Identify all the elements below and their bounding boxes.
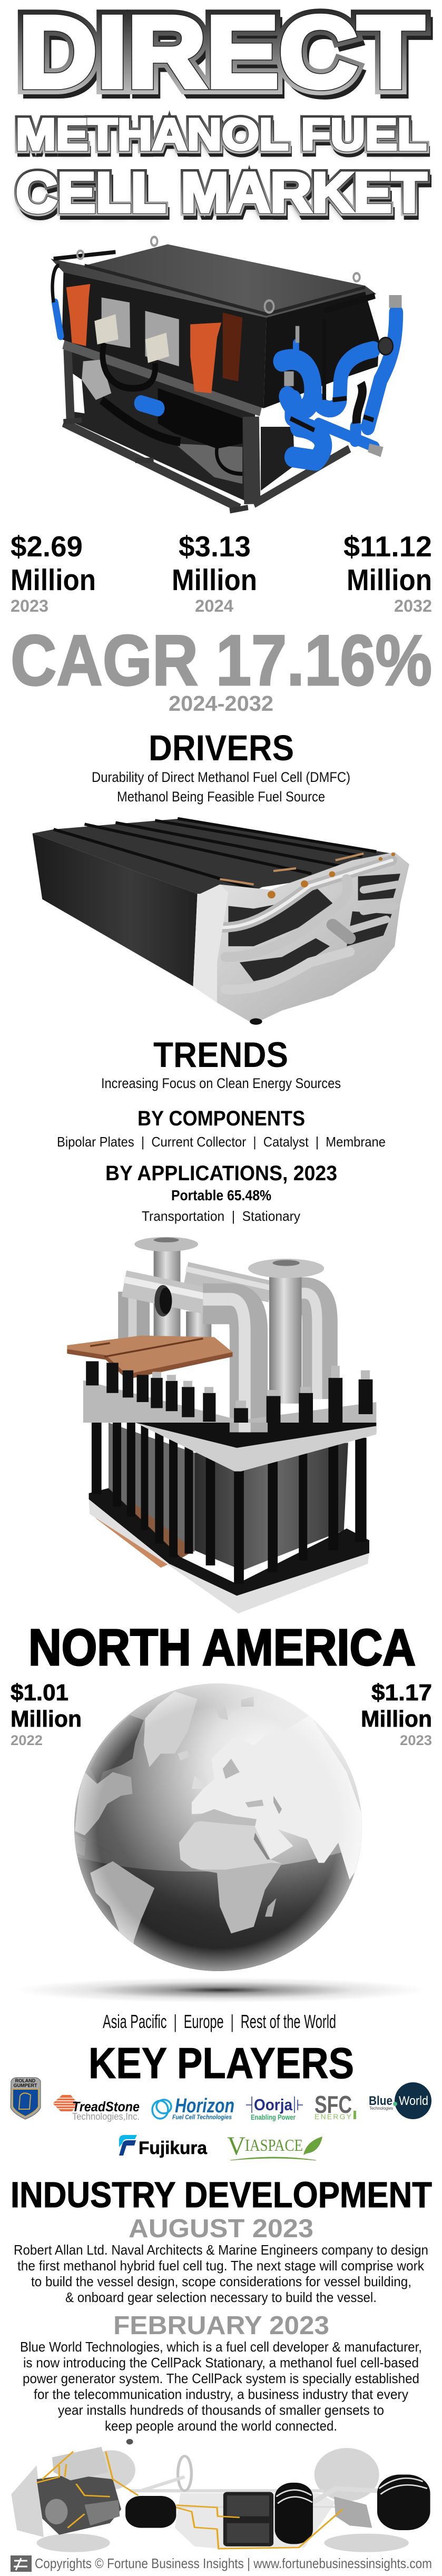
stack side face: [33, 834, 198, 986]
battery plate: [223, 2492, 273, 2546]
CAGR period: 2024-2032: [169, 691, 273, 716]
logo: Oorja: [246, 2095, 303, 2121]
drivers list: Methanol Being Feasible Fuel Source: [117, 789, 325, 805]
logo: TreadStone: [53, 2095, 140, 2122]
title line: CELL MARKET: CELL MARKET: [16, 161, 427, 224]
figure: 2024: Million: [172, 563, 257, 597]
logo: Roland Gumpert: GUMPERT: [14, 2083, 37, 2088]
logo: Blue World: Blue: [369, 2094, 392, 2108]
figure: 2024: $3.13: [179, 530, 251, 563]
logo: Blue World: Technologies: [369, 2106, 393, 2111]
image: fuel cell system module: [51, 237, 402, 511]
footer: [11, 2555, 432, 2572]
lower hemisphere shading: [77, 1847, 360, 1971]
figure: 2024: 2024: [195, 596, 233, 615]
title line: DIRECT: DIRECT: [22, 1, 428, 114]
regional figure: 2023: 2023: [400, 1732, 432, 1748]
image: vehicle chassis: [11, 2439, 430, 2552]
title line: METHANOL FUEL: METHANOL FUEL: [16, 114, 427, 163]
fuel lines: [37, 2452, 342, 2549]
blue coolant pipes: [55, 302, 396, 461]
orange connectors: [66, 284, 242, 393]
drivers list: [92, 769, 350, 805]
regional figure: 2022: 2022: [11, 1732, 43, 1748]
logo: Blue World: [369, 2082, 431, 2119]
lower frame: [63, 345, 350, 511]
market size figures: [11, 530, 432, 615]
globe shadow: [16, 1977, 427, 2003]
development text: August 2023: to build the vessel design, scope considerations for vessel building,: [31, 2274, 411, 2289]
logo: Oorja: Oorja: [254, 2095, 293, 2114]
chassis frame: [130, 2456, 378, 2549]
logo: Oorja: Enabling Power: [251, 2113, 296, 2121]
gray side panels: [102, 297, 179, 366]
logo: Blue World: World: [399, 2094, 428, 2108]
title line: DIRECT: DIRECT: [19, 0, 425, 112]
drivers heading: DRIVERS: [149, 728, 294, 768]
development text: August 2023: the first methanol hybrid fuel cell tug. The next stage will comprise work: [17, 2258, 425, 2274]
engine: [37, 2475, 121, 2535]
silver pipe ends: [284, 295, 402, 457]
copper accents: [220, 854, 364, 885]
lifting rings: [77, 237, 360, 312]
globe: [68, 1683, 369, 1981]
silver manifold body: [193, 852, 409, 1024]
development text: February 2023: [20, 2339, 422, 2434]
title line: CELL MARKET: CELL MARKET: [16, 161, 427, 224]
trends heading: TRENDS: [153, 1035, 288, 1075]
regional figure: 2022: [11, 1680, 82, 1748]
tank: middle: [275, 2483, 313, 2544]
development text: August 2023: & onboard gear selection necessary to build the vessel.: [65, 2289, 377, 2305]
regional figure: 2023: [361, 1680, 432, 1748]
leading application: Portable 65.48%: [171, 1187, 271, 1203]
development text: February 2023: power generator system. The CellPack system is specially established: [23, 2371, 419, 2386]
end plate: [193, 885, 228, 1003]
title line: CELL MARKET: CELL MARKET: [16, 161, 427, 224]
logo: Viaspace: V: [227, 2131, 245, 2160]
black hose: [103, 343, 155, 388]
development date: February 2023: FEBRUARY 2023: [113, 2311, 329, 2340]
tank: front: [125, 2496, 176, 2528]
silver tubes: [223, 860, 397, 990]
logo: Fujikura: [119, 2135, 208, 2158]
logo: Viaspace: IASPACE: [245, 2136, 303, 2154]
key player logos: [11, 2078, 431, 2160]
regional figure: 2023: $1.17: [371, 1680, 432, 1706]
dark interior patches: [228, 874, 400, 981]
drivers list: Durability of Direct Methanol Fuel Cell (DMFC): [92, 769, 350, 785]
logo: Roland Gumpert: ROLAND: [15, 2078, 36, 2083]
other applications: Transportation | Stationary: [142, 1208, 300, 1224]
logo: TreadStone: Technologies,Inc.: [72, 2111, 140, 2122]
logo: Horizon: [152, 2095, 234, 2121]
stack lower assembly: [89, 1423, 376, 1613]
logo: SFC Energy: ENERGY: [315, 2112, 352, 2121]
development date: August 2023: AUGUST 2023: [129, 2215, 313, 2243]
continents: [75, 1691, 364, 1967]
front face: [62, 272, 267, 408]
black fittings: [53, 252, 393, 430]
image: fuel cell stack with pipes: [67, 1237, 376, 1613]
logo: Horizon: Fuel Cell Technologies: [172, 2113, 232, 2121]
figure: 2023: $2.69: [11, 530, 83, 563]
stack upper assembly: [67, 1237, 376, 1432]
trends item: Increasing Focus on Clean Energy Sources: [101, 1075, 341, 1091]
applications heading: BY APPLICATIONS, 2023: [105, 1162, 337, 1185]
logo: Fujikura: Fujikura: [139, 2138, 208, 2158]
plate rim: [85, 266, 365, 314]
stack top stripes: [54, 819, 376, 890]
title: [16, 0, 429, 229]
footer logo: [11, 2555, 32, 2572]
title line: CELL MARKET: CELL MARKET: [16, 166, 427, 229]
figure: 2023: Million: [11, 563, 96, 597]
top plate: [51, 244, 376, 318]
right face: [263, 292, 379, 408]
figure: 2032: 2032: [394, 596, 432, 615]
logo: Horizon: Horizon: [175, 2095, 234, 2117]
components heading: BY COMPONENTS: [137, 1107, 305, 1130]
wheels and radiator: [11, 2448, 409, 2552]
figure: 2032: Million: [347, 563, 432, 597]
image: fuel cell stack: [33, 819, 409, 1025]
title line: CELL MARKET: CELL MARKET: [18, 165, 429, 229]
components list: Bipolar Plates | Current Collector | Catalyst | Membrane: [57, 1134, 386, 1150]
title line: METHANOL FUEL: METHANOL FUEL: [16, 110, 427, 159]
logo: Viaspace: [227, 2131, 322, 2160]
title line: METHANOL FUEL: METHANOL FUEL: [16, 110, 427, 159]
figure: 2023: 2023: [11, 596, 48, 615]
figure: 2024: [172, 530, 257, 615]
development text: February 2023: is now introducing the CellPack Stationary, a methanol fuel cell-based: [23, 2355, 419, 2371]
white connectors: [94, 314, 169, 363]
logo: TreadStone: TreadStone: [72, 2099, 140, 2114]
gearbox: [334, 2496, 372, 2528]
figure: 2032: $11.12: [343, 530, 432, 563]
figure: 2023: [11, 530, 96, 615]
foot: [250, 1018, 262, 1025]
title line: METHANOL FUEL: METHANOL FUEL: [17, 114, 428, 163]
regional figure: 2023: Million: [361, 1706, 432, 1732]
development text: August 2023: [14, 2242, 428, 2305]
development text: February 2023: Blue World Technologies, which is a fuel cell developer & manufacturer,: [20, 2339, 422, 2355]
development text: February 2023: year installs hundreds of thousands of smaller gensets to: [58, 2402, 384, 2418]
tank: rear: [377, 2475, 430, 2530]
figure: 2032: [343, 530, 432, 615]
development text: February 2023: for the telecommunication industry, a business industry that every: [34, 2386, 408, 2402]
sensor: [126, 2439, 133, 2444]
brass bolts: [268, 853, 395, 898]
logo: Roland Gumpert: [11, 2078, 41, 2119]
logo: SFC Energy: SFC: [315, 2091, 352, 2118]
regional figure: 2022: Million: [11, 1706, 82, 1732]
regional figure: 2022: $1.01: [11, 1680, 68, 1706]
title line: METHANOL FUEL: METHANOL FUEL: [16, 110, 427, 159]
key players heading: KEY PLAYERS: [89, 2039, 354, 2088]
stack top face: [33, 819, 392, 894]
development text: February 2023: keep people around the world connected.: [105, 2418, 337, 2434]
